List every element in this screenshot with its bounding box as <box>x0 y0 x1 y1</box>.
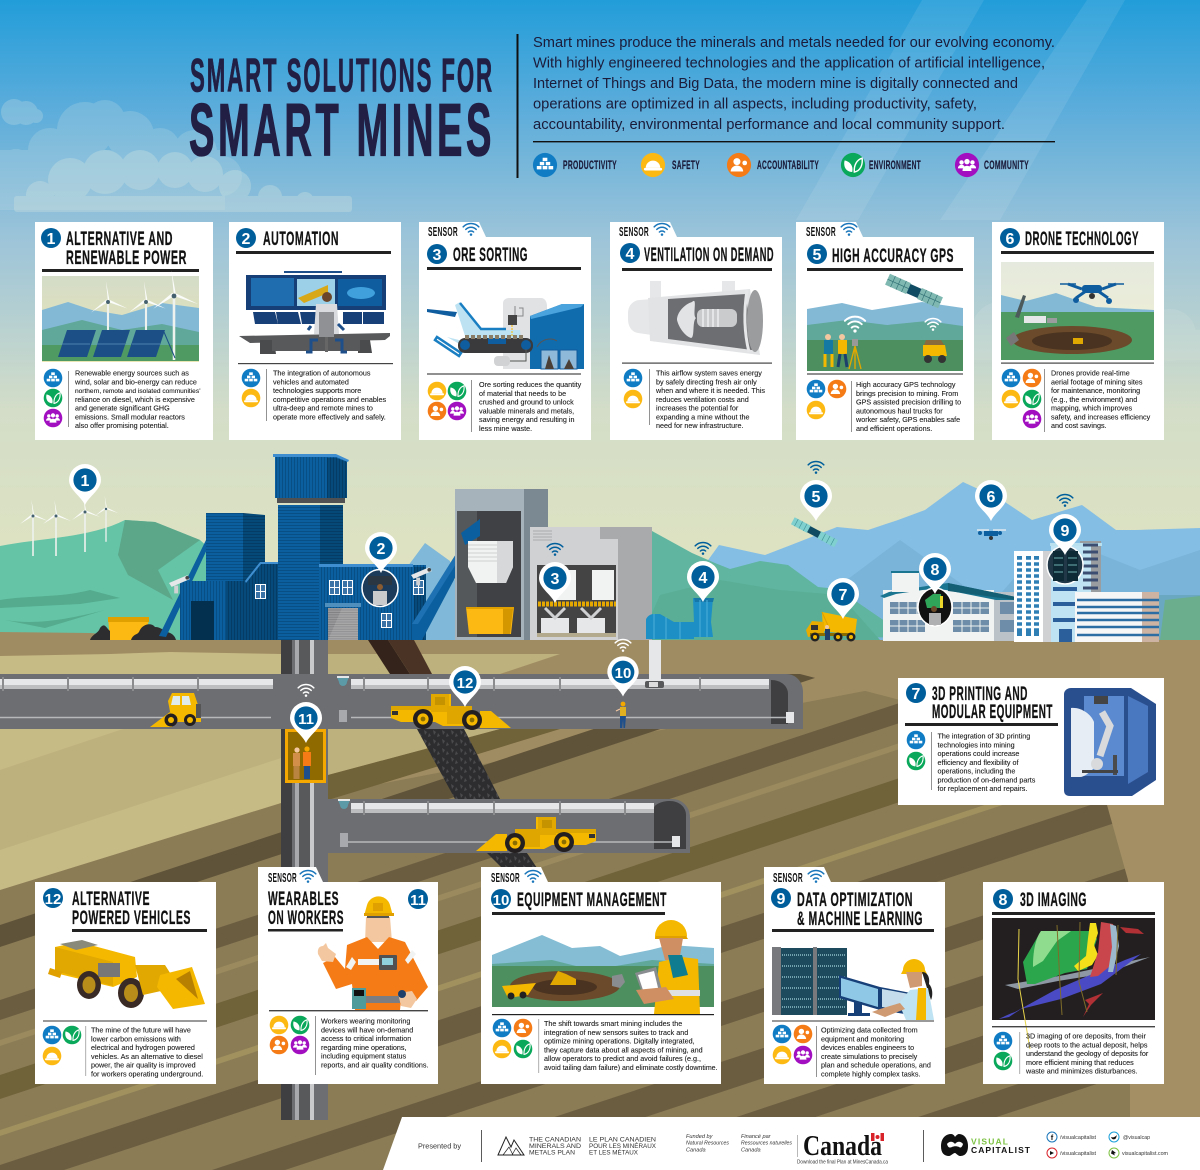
social links: /visualcapitalist <box>1060 1151 1097 1157</box>
funding statement: Financé par <box>741 1134 772 1140</box>
worker in tunnel <box>616 702 626 728</box>
panel: 4 ventilation on demand: This airflow system saves energy <box>656 368 762 378</box>
panel: 9 data optimization and machine learning: equipment and monitoring <box>821 1034 904 1043</box>
footer band <box>383 1117 1200 1170</box>
panel: 6 drone technology: mapping, which improves <box>1051 404 1133 412</box>
panel: 11 wearables on workers: access to critical information <box>321 1034 411 1043</box>
panel: 3 ore sorting: valuable minerals and metals, <box>479 406 574 415</box>
panel: 3 ore sorting: of material that needs to be <box>479 389 566 398</box>
panel: 12 alternative powered vehicles: ALTERNATIVE <box>72 888 150 910</box>
logo: canadian minerals and metals plan: POUR LES MINÉRAUX <box>589 1143 656 1150</box>
panel: 8 3d imaging: 3D IMAGING <box>1020 889 1087 911</box>
panel: 4 ventilation on demand: SENSOR <box>619 224 649 239</box>
panel: 4 ventilation on demand: by safely directing fresh air only <box>656 377 757 386</box>
illustration: worker with wearables <box>318 896 428 1010</box>
lower tunnel <box>328 799 690 853</box>
illustration: control room <box>239 271 390 354</box>
location pins: 2 <box>377 541 386 558</box>
panel: 6 drone technology: (e.g., the environment) and <box>1051 395 1137 404</box>
panel: 1 alternative and renewable power: 1 <box>47 231 56 248</box>
panel: 6 drone technology: and cost savings. <box>1051 421 1107 430</box>
city towers <box>1014 541 1159 642</box>
funding statement: Canada <box>741 1148 761 1154</box>
panel: 3 ore sorting: SENSOR <box>428 224 458 239</box>
panel: 8 3d imaging: 8 <box>999 892 1008 909</box>
logo: Canada wordmark: Canada <box>803 1130 882 1162</box>
panel: 1 alternative and renewable power: also offer promising potential. <box>75 421 169 430</box>
logo: visual capitalist: CAPITALIST <box>971 1145 1031 1155</box>
illustration: drone over pit <box>1001 262 1154 360</box>
panel: 3 ore sorting: crushed and ground to unlock <box>479 398 574 406</box>
panel: 3 ore sorting: ORE SORTING <box>453 244 528 266</box>
panel: 1 alternative and renewable power <box>35 222 213 440</box>
panel: 2 automation: 2 <box>242 231 251 248</box>
panel: 5 high accuracy gps: High accuracy GPS technology <box>856 380 956 389</box>
panel: 12 alternative powered vehicles: vehicles. As an alternative to diesel <box>91 1052 203 1061</box>
loader vehicle upper left <box>150 693 201 727</box>
office building <box>880 571 1016 641</box>
panel: 12 alternative powered vehicles: POWERED VEHICLES <box>72 907 191 929</box>
panel: 12 alternative powered vehicles: lower carbon emissions with <box>91 1034 181 1043</box>
panel: 5 high accuracy gps: worker safety, GPS enables safe <box>855 415 960 424</box>
social links <box>1047 1132 1168 1158</box>
panel: 2 automation <box>229 222 401 440</box>
logo: Canada wordmark: Download the final Plan at MinesCanada.ca <box>797 1160 888 1166</box>
LHD vehicle lower tunnel <box>476 817 596 853</box>
panel: 10 equipment management: avoid tailing dam failure) and eliminate costly downtime. <box>544 1065 718 1072</box>
panel: 9 data optimization and machine learning <box>764 867 945 1084</box>
panel: 7 3d printing and modular equipment: The integration of 3D printing <box>938 732 1030 740</box>
panel: 5 high accuracy gps: HIGH ACCURACY GPS <box>832 245 954 267</box>
footer divider two <box>922 1130 925 1162</box>
sky light beams <box>796 0 1125 220</box>
social links: @visualcap <box>1123 1135 1150 1141</box>
panel: 9 data optimization and machine learning: Optimizing data collected from <box>821 1026 918 1034</box>
wind turbines small <box>20 496 118 556</box>
panel: 7 3d printing and modular equipment: technologies into mining <box>938 740 1015 749</box>
panel: 5 high accuracy gps: brings precision to mining. From <box>856 389 958 398</box>
panel: 5 high accuracy gps: autonomous haul trucks for <box>856 406 943 415</box>
location pins: 9 <box>1061 523 1070 540</box>
panel: 5 high accuracy gps: GPS assisted precision drilling to <box>856 398 961 406</box>
panel: 8 3d imaging: waste and minimizes disturbances. <box>1025 1066 1137 1076</box>
panel: 6 drone technology: for maintenance, monitoring <box>1051 386 1140 395</box>
scene drone <box>977 530 1006 540</box>
panel: 12 alternative powered vehicles: 12 <box>45 891 61 908</box>
blue processing plant <box>159 454 456 640</box>
funding statement: Canada <box>686 1148 706 1154</box>
panel: 3 ore sorting: Ore sorting reduces the quantity <box>479 380 582 389</box>
location pins: 10 <box>615 665 631 682</box>
location pins <box>69 464 1081 743</box>
legend <box>533 153 1029 177</box>
location pins: 3 <box>551 571 560 588</box>
panel: 2 automation: vehicles and automated <box>273 377 349 386</box>
panel: 11 wearables on workers <box>258 867 438 1084</box>
panel: 6 drone technology: Drones provide real-time <box>1051 368 1130 378</box>
panel: 4 ventilation on demand: increases the potential for <box>656 404 739 412</box>
panel: 10 equipment management: EQUIPMENT MANAGEMENT <box>517 889 667 911</box>
panel: 5 high accuracy gps: and efficient operations. <box>856 424 932 433</box>
panel: 7 3d printing and modular equipment: MODULAR EQUIPMENT <box>932 701 1053 723</box>
upper tunnel <box>0 640 803 729</box>
panel: 1 alternative and renewable power: northern, remote and isolated communities’ <box>75 388 201 395</box>
panel: 3 ore sorting <box>419 222 591 440</box>
panel: 9 data optimization and machine learning: & MACHINE LEARNING <box>797 908 923 930</box>
social links: f <box>1051 1133 1054 1142</box>
panel: 4 ventilation on demand: when and where it is needed. This <box>655 386 765 395</box>
panel: 9 data optimization and machine learning: DATA OPTIMIZATION <box>797 889 913 911</box>
panel: 4 ventilation on demand: reduces ventilation costs and <box>656 395 749 404</box>
panel: 7 3d printing and modular equipment <box>898 678 1164 805</box>
location pins: 4 <box>699 570 708 587</box>
panel: 1 alternative and renewable power: Renewable energy sources such as <box>75 368 189 378</box>
legend: ENVIRONMENT <box>869 160 921 172</box>
panel: 7 3d printing and modular equipment: operations, including the <box>938 766 1015 776</box>
panel: 7 3d printing and modular equipment: operations could increase <box>938 749 1019 758</box>
panel: 10 equipment management: SENSOR <box>491 870 520 885</box>
logo: visual capitalist: VISUAL <box>971 1136 1008 1146</box>
panel: 1 alternative and renewable power: wind, solar and bio-energy can reduce <box>74 377 197 386</box>
intro paragraph: Smart mines produce the minerals and metals needed for our evolving economy. <box>533 34 1055 51</box>
illustration: electric LHD <box>48 940 205 1009</box>
ground and underground strata <box>0 632 1200 1170</box>
clouds <box>0 99 1200 361</box>
panel: 4 ventilation on demand <box>610 222 782 440</box>
panel: 2 automation: competitive operations and enables <box>273 395 386 404</box>
illustration: pit landscape with operator <box>492 920 714 1014</box>
panel: 11 wearables on workers: including equipment status <box>321 1052 407 1060</box>
logo: visual capitalist <box>941 1134 1031 1156</box>
panel: 6 drone technology: safety, and increases efficiency <box>1051 412 1151 421</box>
panel: 10 equipment management: 10 <box>493 892 509 909</box>
panel: 11 wearables on workers: 11 <box>410 892 426 909</box>
illustration: mine fan <box>628 281 763 355</box>
panel: 9 data optimization and machine learning: 9 <box>777 891 786 908</box>
panel: 1 alternative and renewable power: reliance on diesel, which is expensive <box>75 395 195 404</box>
intro divider <box>516 34 518 178</box>
intro paragraph: accountability, environmental performance and local community support. <box>533 116 1005 133</box>
panel: 1 alternative and renewable power: RENEWABLE POWER <box>66 247 187 269</box>
panel: 4 ventilation on demand: 4 <box>626 246 635 263</box>
illustration: 3d ore deposit model <box>992 918 1155 1049</box>
panel: 6 drone technology <box>992 222 1164 440</box>
panel: 9 data optimization and machine learning: devices enables engineers to <box>821 1043 914 1052</box>
panel: 11 wearables on workers: ON WORKERS <box>268 907 344 929</box>
panel: 7 3d printing and modular equipment: efficiency and flexibility of <box>938 758 1018 767</box>
location pins: 5 <box>812 489 821 506</box>
scene satellite <box>791 517 838 547</box>
illustration: 3d printer <box>1064 688 1156 796</box>
panel: 5 high accuracy gps: SENSOR <box>806 224 836 239</box>
surface coal bin and piles <box>90 617 176 640</box>
surveillance cameras underground <box>337 676 350 809</box>
location pins: 6 <box>987 489 996 506</box>
legend: ACCOUNTABILITY <box>757 160 819 172</box>
panel: 1 alternative and renewable power: and generate significant GHG <box>75 404 170 412</box>
location pins: 7 <box>839 587 848 604</box>
legend: PRODUCTIVITY <box>563 160 617 172</box>
panel: 11 wearables on workers: Workers wearing monitoring <box>321 1016 410 1026</box>
panel: 7 3d printing and modular equipment: for replacement and repairs. <box>938 784 1027 793</box>
panel: 11 wearables on workers: SENSOR <box>268 870 297 885</box>
mine shaft <box>281 640 328 1120</box>
funding statement: Funded by <box>686 1134 714 1140</box>
illustration: GPS surveyors <box>807 274 963 371</box>
green foothills <box>0 520 1200 640</box>
intro paragraph: Internet of Things and Big Data, the modern mine is digitally connected and <box>533 75 1018 92</box>
panel: 6 drone technology: 6 <box>1006 231 1015 248</box>
wifi signals over scene <box>298 462 1073 696</box>
LHD vehicle upper tunnel <box>391 694 511 730</box>
location pins: 8 <box>931 562 940 579</box>
location pins: 1 <box>81 473 90 490</box>
illustration: wind and solar <box>42 270 199 362</box>
panel: 12 alternative powered vehicles: power, the air quality is improved <box>91 1060 196 1070</box>
panel: 2 automation: technologies supports more <box>273 386 361 395</box>
hauled dump truck <box>806 612 857 642</box>
panel: 2 automation: The integration of autonomous <box>273 368 371 378</box>
separation plant <box>530 527 652 640</box>
location pins: 12 <box>457 675 473 692</box>
panel: 9 data optimization and machine learning: complete highly complex tasks. <box>821 1069 920 1078</box>
panel: 3 ore sorting: less mine waste. <box>479 424 532 433</box>
panel: 8 3d imaging: more efficient mining that reduces <box>1026 1058 1134 1067</box>
panel: 9 data optimization and machine learning: plan and schedule operations, and <box>821 1060 931 1070</box>
funding statement: Ressources naturelles <box>741 1140 792 1146</box>
panel: 7 3d printing and modular equipment: production of on-demand parts <box>938 775 1036 784</box>
panel: 6 drone technology: aerial footage of mining sites <box>1051 377 1143 386</box>
panel: 8 3d imaging: 3D imaging of ore deposits, from their <box>1026 1032 1146 1040</box>
panel: 12 alternative powered vehicles: The mine of the future will have <box>91 1026 191 1034</box>
panel: 3 ore sorting: 3 <box>433 247 442 264</box>
footer: presented by: Presented by <box>418 1144 462 1150</box>
funding statement: Natural Resources <box>686 1140 729 1146</box>
panel: 10 equipment management: optimize mining operations. Digitally integrated, <box>544 1036 695 1046</box>
funding statement <box>686 1134 792 1154</box>
panel: 8 3d imaging <box>983 882 1164 1084</box>
panel: 12 alternative powered vehicles: electrical and hydrogen powered <box>91 1043 195 1052</box>
panel: 7 3d printing and modular equipment: 7 <box>912 686 921 703</box>
inset circles on scene <box>362 546 1083 626</box>
panel: 2 automation: AUTOMATION <box>263 228 339 250</box>
intro paragraph: operations are optimized in all aspects, including productivity, safety, <box>533 96 977 112</box>
panel: 3 ore sorting: saving energy and resulting in <box>479 415 574 424</box>
panel: 8 3d imaging: deep roots to the actual deposit, helps <box>1026 1040 1148 1049</box>
sky background <box>0 0 1200 660</box>
social links: /visualcapitalist <box>1060 1135 1097 1141</box>
logo: canadian minerals and metals plan: THE CANADIAN <box>529 1136 581 1144</box>
location pins: 11 <box>298 711 314 728</box>
legend: SAFETY <box>672 160 700 172</box>
logo: canadian minerals and metals plan: MINERALS AND <box>529 1143 582 1150</box>
panel: 5 high accuracy gps <box>796 222 974 440</box>
panel: 10 equipment management: integration of new sensors suites to track and <box>544 1028 688 1037</box>
ventilation ducts <box>646 598 714 639</box>
title: SMART MINES <box>189 88 495 172</box>
panel: 11 wearables on workers: reports, and air quality conditions. <box>321 1060 428 1069</box>
illustration: servers and engineer <box>772 947 934 1020</box>
intro paragraph <box>533 34 1055 133</box>
panel: 8 3d imaging: understand the geology of deposits for <box>1026 1049 1149 1058</box>
panel: 2 automation: operate more effectively and safely. <box>273 412 386 421</box>
panel: 12 alternative powered vehicles <box>35 882 216 1084</box>
panel: 2 automation: ultra-deep and remote mines to <box>273 404 373 412</box>
panel: 4 ventilation on demand: need for new infrastructure. <box>656 421 744 430</box>
intro paragraph: With highly engineered technologies and the application of artificial intelligence, <box>533 54 1045 72</box>
social links: visualcapitalist.com <box>1122 1151 1168 1157</box>
panel: 4 ventilation on demand: VENTILATION ON DEMAND <box>644 244 774 266</box>
panel: 11 wearables on workers: devices will have on-demand <box>321 1025 413 1034</box>
panel: 9 data optimization and machine learning: create simulations to precisely <box>821 1052 918 1061</box>
logo: canadian minerals and metals plan: ET LES MÉTAUX <box>589 1150 638 1156</box>
elevator with workers <box>285 729 326 783</box>
panel: 4 ventilation on demand: expanding a mine without the <box>656 412 750 421</box>
logo: canadian minerals and metals plan <box>498 1136 656 1156</box>
panel: 10 equipment management: allow operators to predict and avoid failures (e.g., <box>544 1054 701 1063</box>
distant blue mountains <box>405 482 1200 640</box>
title <box>189 48 495 172</box>
footer divider one <box>480 1130 483 1162</box>
legend: COMMUNITY <box>984 160 1029 172</box>
bin building <box>455 489 548 640</box>
panel: 11 wearables on workers: regarding mine operations, <box>321 1043 407 1052</box>
ore pass and conveyor shafts <box>368 640 547 883</box>
intro rule <box>533 141 1055 142</box>
panel: 1 alternative and renewable power: emissions. Small modular reactors <box>75 412 185 421</box>
logo: canadian minerals and metals plan: METALS PLAN <box>529 1150 575 1156</box>
panel: 12 alternative powered vehicles: for workers operating underground. <box>91 1069 203 1078</box>
illustration: ore sorter <box>427 298 584 369</box>
panel: 9 data optimization and machine learning: SENSOR <box>773 870 803 885</box>
panel: 10 equipment management: they capture data about all aspects of mining, and <box>544 1045 703 1054</box>
panel: 10 equipment management: The shift towards smart mining includes the <box>544 1019 682 1028</box>
logo: canadian minerals and metals plan: LE PLAN CANADIEN <box>589 1136 656 1144</box>
panel: 1 alternative and renewable power: ALTERNATIVE AND <box>66 228 173 250</box>
panel: 5 high accuracy gps: 5 <box>813 247 822 264</box>
panel: 7 3d printing and modular equipment: 3D PRINTING AND <box>932 683 1028 705</box>
panel: 10 equipment management <box>481 867 721 1084</box>
infographic canvas: SMART SOLUTIONS FOR <box>190 48 494 102</box>
panel: 11 wearables on workers: WEARABLES <box>268 888 339 910</box>
